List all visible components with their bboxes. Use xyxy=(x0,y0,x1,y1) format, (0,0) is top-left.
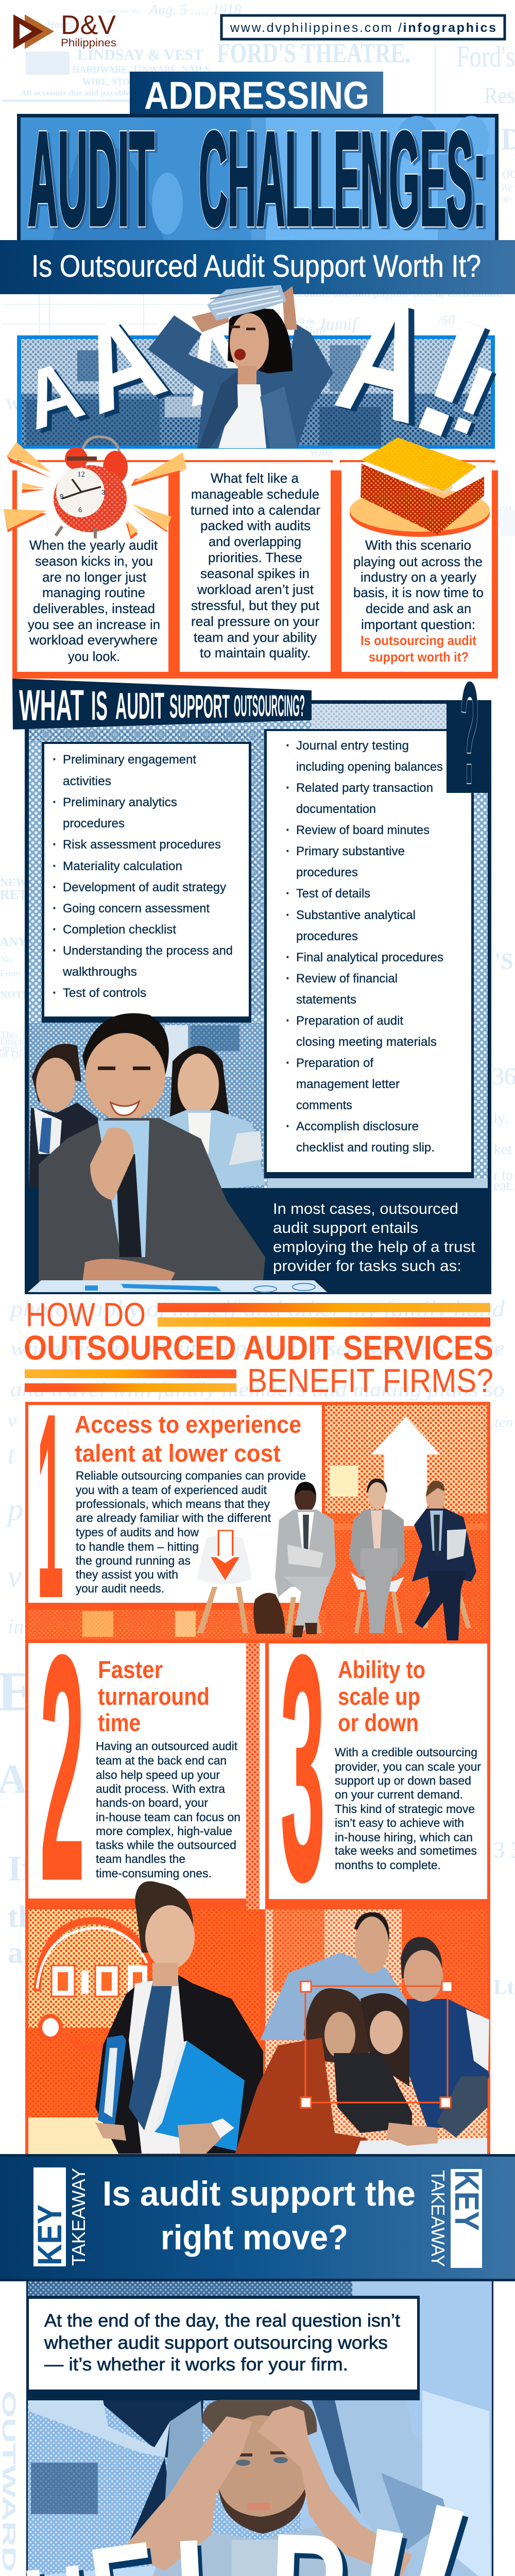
hero panel: stressed woman with AAAA xyxy=(13,260,515,478)
background watermark: vintage ledger sheets: If xyxy=(8,1849,34,1889)
background watermark: vintage ledger sheets: of Disch xyxy=(0,1049,35,1060)
exclamation lettering: AAAA!!: A xyxy=(13,343,93,447)
text block: when the yearly audit: season kicks in, you xyxy=(35,553,153,569)
exclamation lettering: AAAA!!: ! xyxy=(442,346,513,460)
icon: double arrow mark xyxy=(13,14,54,49)
list box: left tasks: · xyxy=(53,944,57,958)
key takeaway band xyxy=(0,2154,515,2281)
text block: in most cases: employing the help of a trust xyxy=(273,1239,476,1256)
heading: is audit support the right move: right move? xyxy=(161,2218,348,2257)
list box: right tasks: Related party transaction xyxy=(296,781,433,795)
benefit body: also help speed up your xyxy=(96,1768,220,1782)
text block: what felt manageable: seasonal spikes in xyxy=(200,566,310,581)
text block: what felt manageable: priorities. These xyxy=(208,550,302,565)
heading banner: IS xyxy=(91,683,108,728)
benefit body: to handle them – hitting xyxy=(76,1540,199,1553)
background watermark: vintage ledger sheets: ANY xyxy=(0,936,27,949)
list box: right tasks: · xyxy=(286,951,290,964)
left tag: KEY xyxy=(30,2205,68,2265)
exclamation lettering: AAAA!!: ! xyxy=(438,344,509,457)
benefit body: the ground running as xyxy=(76,1554,191,1567)
heading: how do outsourced audit services benefit firms: BENEFIT FIRMS? xyxy=(247,1362,493,1399)
orange frame xyxy=(12,460,498,679)
list box: left tasks: · xyxy=(53,753,57,767)
benefit body: team at the back end can xyxy=(96,1754,227,1767)
background watermark: handwriting behind benefits heading: and travel with family members and making plans so xyxy=(10,1378,505,1401)
icon: folder stack xyxy=(350,437,490,537)
man left xyxy=(29,1044,98,1188)
benefit body: your audit needs. xyxy=(76,1582,164,1595)
list box: left tasks: · xyxy=(53,923,57,937)
charts on desk xyxy=(28,1280,327,1292)
subtitle band xyxy=(0,240,515,294)
panel: benefit 1 access to talent xyxy=(25,1360,490,1652)
background watermark: vintage ledger sheets: ket xyxy=(493,1141,512,1158)
icon: alarm clock: 3 xyxy=(101,488,105,496)
list box: right tasks: Review of board minutes xyxy=(296,823,430,837)
left tag xyxy=(30,2167,89,2266)
question mark block xyxy=(447,651,491,815)
callout: highlighted question: Is outsourcing audit xyxy=(360,633,476,648)
list box: right tasks: management letter xyxy=(296,1077,400,1091)
list box: left tasks: · xyxy=(53,986,57,1000)
text block: what felt manageable: manageable schedule xyxy=(191,486,319,502)
exclamation lettering: AAAA!!: A xyxy=(323,260,448,459)
photo: man glasses vest xyxy=(401,1937,489,2128)
icon: bag xyxy=(253,1593,285,1634)
headline text: AUDIT xyxy=(28,104,154,253)
background watermark: vintage ledger sheets: th xyxy=(8,1900,35,1934)
panel: benefit 3 ability to scale: 3 xyxy=(281,1590,325,1946)
background watermark: vintage ledger sheets: 'S xyxy=(494,948,513,974)
list box: right tasks: statements xyxy=(296,993,356,1007)
heading: how do outsourced audit services benefit firms: HOW DO xyxy=(26,1296,146,1333)
benefit title xyxy=(338,1656,425,1736)
benefit body xyxy=(96,1739,241,1880)
benefit body: professionals, which means that they xyxy=(76,1497,270,1511)
text block: when the yearly audit: you look. xyxy=(68,649,120,664)
heading banner: WHAT xyxy=(19,681,84,730)
benefit body: team handles the xyxy=(96,1852,185,1866)
background watermark: vintage ledger sheets: NOTE xyxy=(0,989,29,1001)
icon: alarm clock: 6 xyxy=(78,506,82,514)
text block: when the yearly audit: are no longer just xyxy=(42,569,147,585)
benefit body: in-house team can focus on xyxy=(96,1810,241,1824)
right tag: TAKEAWAY xyxy=(427,2170,449,2267)
background watermark: vintage ledger sheets: This Ti xyxy=(0,1029,30,1041)
list box: right tasks: Substantive analytical xyxy=(296,908,416,922)
text block: with this scenario: industry on a yearly xyxy=(360,569,476,585)
text block: in most cases xyxy=(273,1200,476,1275)
benefit title: time xyxy=(98,1709,141,1736)
photo: women at desk xyxy=(235,1988,488,2154)
benefit body: time-consuming ones. xyxy=(96,1867,212,1880)
background watermark: vintage ledger sheets: Half xyxy=(303,325,328,338)
background watermark: vintage ledger sheets: ame tim xyxy=(0,1043,33,1054)
list box: right tasks: comments xyxy=(296,1098,352,1112)
background watermark: vintage ledger sheets: accounts due and payable first of each month xyxy=(288,291,503,299)
background watermark: handwriting behind benefits heading xyxy=(6,1296,513,1638)
url box: www.dvphilippines.com /infographics xyxy=(230,21,496,35)
benefit body: are already familiar with the different xyxy=(76,1511,271,1524)
background watermark: vintage ledger sheets: No. xyxy=(0,954,13,964)
heading banner: AUDIT xyxy=(115,686,164,727)
background watermark: handwriting behind benefits heading: p xyxy=(6,1493,23,1527)
background watermark: vintage ledger sheets: RET xyxy=(0,887,27,902)
exclamation lettering: AAAA!!: ! xyxy=(390,279,514,476)
list box: left tasks: Preliminary engagement xyxy=(63,753,196,767)
background watermark: vintage ledger sheets: W xyxy=(216,690,249,730)
background watermark: handwriting behind benefits heading: t xyxy=(8,1440,15,1469)
list box: right tasks xyxy=(264,729,474,1178)
list box: right tasks: including opening balances xyxy=(296,760,443,774)
man centre xyxy=(39,1013,265,1286)
list box: left tasks: · xyxy=(53,880,57,894)
benefit title: talent at lower cost xyxy=(75,1439,281,1467)
exclamation lettering: AAAA!!: A xyxy=(329,262,454,461)
text block: what felt manageable: real pressure on your xyxy=(191,614,319,629)
text block: in most cases: provider for tasks such as: xyxy=(273,1258,461,1275)
benefit body: With a credible outsourcing xyxy=(335,1745,477,1759)
background watermark: handwriting behind benefits heading: v xyxy=(8,1560,22,1594)
heading: is audit support the right move xyxy=(102,2174,416,2257)
benefit body: on your current demand. xyxy=(335,1788,463,1801)
text block: when the yearly audit: When the yearly audit xyxy=(29,537,158,553)
list box: left tasks: procedures xyxy=(63,817,125,831)
panel: what is audit support outsourcing: OUTSOURCING? xyxy=(234,689,305,723)
background watermark: handwriting behind benefits heading: when visiting beautiful places to see wonders of the xyxy=(10,1336,505,1360)
title block: addressing: ADDRESSING xyxy=(144,74,369,117)
benefit body: they assist you with xyxy=(76,1568,178,1581)
panel: benefit 2 faster turnaround: 2 xyxy=(40,1590,84,1946)
background watermark: vintage ledger sheets: LINDSAY & VEST xyxy=(77,46,203,63)
exclamation lettering: AAAA!!: A xyxy=(66,290,184,443)
list box: right tasks: procedures xyxy=(296,866,358,879)
background watermark: vintage ledger sheets: ly. xyxy=(493,1110,508,1127)
panel: the real question xyxy=(18,2281,515,2576)
text block: when the yearly audit: deliverables, instead xyxy=(33,601,155,616)
logo: D&V Philippines: Philippines xyxy=(61,37,116,49)
benefit title: Access to experience xyxy=(75,1411,301,1438)
list box: right tasks: closing meeting materials xyxy=(296,1035,437,1049)
benefit body: in-house hiring, which can xyxy=(335,1831,473,1844)
callout box: — it’s whether it works for your firm. xyxy=(44,2354,348,2375)
benefit title: turnaround xyxy=(98,1683,210,1710)
callout box: At the end of the day, the real question isn’t xyxy=(44,2311,400,2331)
callout box: whether audit support outsourcing works xyxy=(44,2333,388,2353)
background watermark: vintage ledger sheets: eat. xyxy=(493,1178,514,1194)
photo: man with binders xyxy=(95,1882,276,2154)
background watermark: handwriting behind benefits heading: photography of myself and other my family hand xyxy=(9,1296,505,1321)
benefit title: Ability to xyxy=(338,1656,425,1683)
logo: D&V Philippines xyxy=(13,10,116,49)
background watermark: vintage ledger sheets: 2* Jumif xyxy=(296,315,359,334)
background watermark: vintage ledger sheets: 60 xyxy=(498,516,511,531)
list box: left tasks: Understanding the process and xyxy=(63,944,233,958)
panel: audit season intro xyxy=(4,437,498,679)
text block: with this scenario: playing out across the xyxy=(353,554,483,569)
url box xyxy=(221,15,505,39)
list box: left tasks: Completion checklist xyxy=(63,923,176,937)
benefit body: This kind of strategic move xyxy=(335,1802,475,1816)
benefit body: isn’t easy to achieve with xyxy=(335,1816,464,1829)
panel: benefit 1 access to talent: 1 xyxy=(37,1360,63,1652)
list box: left tasks: · xyxy=(53,902,57,916)
list box: right tasks: Primary substantive xyxy=(296,844,405,858)
background watermark: vintage ledger sheets: Dischar xyxy=(0,1036,32,1047)
photo: candidate seated centre xyxy=(349,1479,405,1633)
list box: left tasks: walkthroughs xyxy=(62,965,137,979)
list box: right tasks: · xyxy=(286,972,290,986)
lettering: HELP!!? xyxy=(18,2459,515,2576)
benefit title xyxy=(75,1411,301,1467)
text block: what felt manageable: What felt like a xyxy=(211,470,299,486)
photo: candidate seated right xyxy=(412,1481,476,1640)
list box: right tasks: · xyxy=(286,781,290,795)
callout box xyxy=(26,2296,420,2400)
headline text: AUDIT xyxy=(28,104,154,253)
selection frame xyxy=(301,1981,452,2108)
title panel: audit challenges xyxy=(17,104,499,255)
text block: with this scenario xyxy=(353,537,484,665)
text block: what felt manageable: team and your ability xyxy=(194,630,317,645)
list box: right tasks: Preparation of xyxy=(296,1056,373,1070)
text block: with this scenario: basis, it is now time to xyxy=(353,585,484,600)
headline text: AUDIT xyxy=(30,106,157,255)
background watermark: vintage ledger sheets: Aug. 5 ..... 1918 xyxy=(148,2,241,18)
background watermark: vintage ledger sheets: WIRE, STO xyxy=(82,76,130,88)
panel: what is audit support outsourcing xyxy=(12,651,491,1294)
icon: alarm clock: 12 xyxy=(77,470,85,479)
icon: alarm clock: 9 xyxy=(60,493,63,500)
text block: in most cases: In most cases, outsourced xyxy=(273,1200,458,1217)
background watermark: handwriting behind benefits heading: in xyxy=(8,1615,24,1638)
benefit body: months to complete. xyxy=(335,1858,441,1872)
background watermark: vintage ledger sheets: NEW xyxy=(0,876,27,889)
icon: empty chair with arrow xyxy=(197,1530,251,1633)
icon: alarm clock xyxy=(54,437,128,538)
photo panel: team around tablet xyxy=(235,1909,490,2154)
benefit body: you with a team of experienced audit xyxy=(76,1483,267,1497)
heading banner: SUPPORT xyxy=(169,688,230,725)
benefit body xyxy=(76,1469,306,1595)
background watermark: handwriting behind benefits heading: v xyxy=(8,1409,17,1432)
background watermark: vintage ledger sheets: W xyxy=(6,396,21,413)
halftone backdrop xyxy=(28,1405,487,1639)
photo: three professionals xyxy=(28,1013,327,1292)
right tag: KEY xyxy=(448,2170,486,2231)
list box: left tasks: Risk assessment procedures xyxy=(63,838,221,852)
exclamation lettering: AAAA!! xyxy=(13,260,515,478)
list box: right tasks: documentation xyxy=(296,802,376,816)
woman xyxy=(154,1046,265,1188)
background watermark: vintage ledger sheets: FORD'S THEATRE. xyxy=(217,38,410,69)
benefit body: audit process. With extra xyxy=(96,1782,225,1795)
text block: in most cases: audit support entails xyxy=(273,1219,418,1236)
exclamation lettering: AAAA!!: A xyxy=(18,346,97,451)
arrow up xyxy=(371,1417,440,1526)
benefit body: provider, you can scale your xyxy=(335,1760,481,1773)
list box: right tasks: · xyxy=(286,887,290,901)
background watermark: vintage ledger sheets: Harry Truman xyxy=(46,18,112,31)
benefit body: tasks while the outsourced xyxy=(96,1838,236,1852)
list box: right tasks: · xyxy=(286,1014,290,1028)
background watermark: vintage ledger sheets: at xyxy=(8,1936,33,1970)
exclamation lettering: AAAA!!: A xyxy=(169,296,265,430)
list box: right tasks: Preparation of audit xyxy=(296,1014,403,1028)
text block: when the yearly audit: you see an increase in xyxy=(28,617,160,632)
benefit body: more complex, high-value xyxy=(96,1824,232,1838)
benefit title: or down xyxy=(338,1709,419,1736)
background watermark: vintage ledger sheets: Grandview, Mo., ...... xyxy=(101,7,154,14)
list box: left tasks: Going concern assessment xyxy=(63,902,210,916)
text block: what felt manageable: packed with audits xyxy=(200,518,311,533)
list box: right tasks: procedures xyxy=(296,929,358,943)
benefit title: scale up xyxy=(338,1683,420,1710)
list box: left tasks: Test of controls xyxy=(63,986,146,1000)
callout: highlighted question xyxy=(360,633,476,665)
photo: candidate seated left xyxy=(275,1482,336,1637)
panel: people backdrop xyxy=(29,1023,264,1189)
list box: right tasks: · xyxy=(286,844,290,858)
photo: stressed man xyxy=(122,2400,412,2576)
text block: what felt manageable xyxy=(191,470,320,660)
list box: right tasks: · xyxy=(286,1120,290,1133)
left tag: TAKEAWAY xyxy=(68,2168,89,2266)
text block: what felt manageable: to maintain quality. xyxy=(200,645,311,660)
text block: with this scenario: decide and ask an xyxy=(366,601,471,616)
background watermark: vintage ledger sheets: r to xyxy=(493,1167,513,1183)
list box: left tasks: · xyxy=(53,859,57,873)
list box: right tasks: · xyxy=(286,823,290,837)
list box: right tasks: Journal entry testing xyxy=(296,739,409,753)
icon: stopwatch dial xyxy=(37,1921,149,2048)
list box: right tasks: · xyxy=(286,1056,290,1070)
background watermark: vintage ledger sheets: /50 xyxy=(437,313,455,328)
text block: what felt manageable: and overlapping xyxy=(209,534,301,549)
background watermark: vintage ledger sheets: 60 xyxy=(498,503,511,518)
text block: what felt manageable: turned into a calendar xyxy=(191,502,320,518)
right tag xyxy=(427,2169,486,2268)
list box: left tasks: Preliminary analytics xyxy=(63,795,177,809)
text block: with this scenario: With this scenario xyxy=(365,537,471,553)
photo panel: professional with folders xyxy=(25,1882,276,2154)
benefit body: support up or down based xyxy=(335,1774,471,1787)
benefit title: Faster xyxy=(98,1656,163,1683)
text block: what felt manageable: stressful, but they put xyxy=(191,598,320,613)
benefit body: hands-on board, your xyxy=(96,1796,208,1809)
text block: when the yearly audit: managing routine xyxy=(42,585,145,600)
background watermark: handwriting behind benefits heading: ten xyxy=(494,1414,513,1431)
heading: is audit support the right move: Is audit support the xyxy=(102,2174,416,2213)
background watermark: vintage ledger sheets: HARDWARE, TINWARE, NAILS xyxy=(72,64,210,75)
background watermark: vintage ledger sheets: We xyxy=(501,182,513,193)
photo: standing man blue shirt xyxy=(260,1912,412,2040)
list box: right tasks: Final analytical procedures xyxy=(296,951,443,964)
background watermark: vintage ledger sheets: or- xyxy=(501,193,512,205)
logo: D&V Philippines: D&V xyxy=(61,10,116,40)
heading banner xyxy=(12,679,312,730)
photo hint: colleagues xyxy=(52,116,494,242)
text block: when the yearly audit: workload everywhere xyxy=(29,632,158,648)
benefit body: Having an outsourced audit xyxy=(96,1739,238,1753)
text block: what felt manageable: workload aren’t just xyxy=(197,582,314,597)
benefit body xyxy=(335,1745,481,1872)
background watermark: vintage ledger sheets: All accounts due and payable xyxy=(21,89,130,97)
list box: left tasks: Materiality calculation xyxy=(63,859,182,873)
list box: left tasks: Development of audit strategy xyxy=(63,880,226,894)
list box: right tasks: · xyxy=(286,908,290,922)
list box: right tasks: Test of details xyxy=(296,887,370,901)
photo backdrop halftone xyxy=(28,2281,491,2576)
background watermark: vintage ledger sheets: Volts xyxy=(309,446,333,459)
icon: burst triangles xyxy=(4,442,186,539)
benefit title xyxy=(98,1656,210,1736)
benefit body: take weeks and sometimes xyxy=(335,1844,477,1857)
list box: left tasks: activities xyxy=(63,774,111,788)
heading: how do outsourced audit services benefit firms xyxy=(24,1296,493,1399)
callout: highlighted question: support worth it? xyxy=(369,649,469,665)
list box: right tasks: Review of financial xyxy=(296,972,398,986)
list box: left tasks: · xyxy=(53,795,57,809)
list box: right tasks: checklist and routing slip. xyxy=(296,1141,435,1155)
exclamation lettering: AAAA!!: A xyxy=(61,286,179,439)
text block: when the yearly audit xyxy=(28,537,160,664)
background watermark: vintage ledger sheets: From xyxy=(0,968,20,978)
text block: with this scenario: important question: xyxy=(361,617,475,632)
list box: left tasks xyxy=(42,742,251,1023)
list box: right tasks: · xyxy=(286,739,290,753)
benefit body: types of audits and how xyxy=(76,1526,199,1539)
list box: right tasks: Accomplish disclosure xyxy=(296,1120,419,1133)
photo: stressed woman xyxy=(148,285,333,448)
list box: left tasks: · xyxy=(53,838,57,852)
benefit body: Reliable outsourcing companies can provide xyxy=(76,1469,306,1482)
